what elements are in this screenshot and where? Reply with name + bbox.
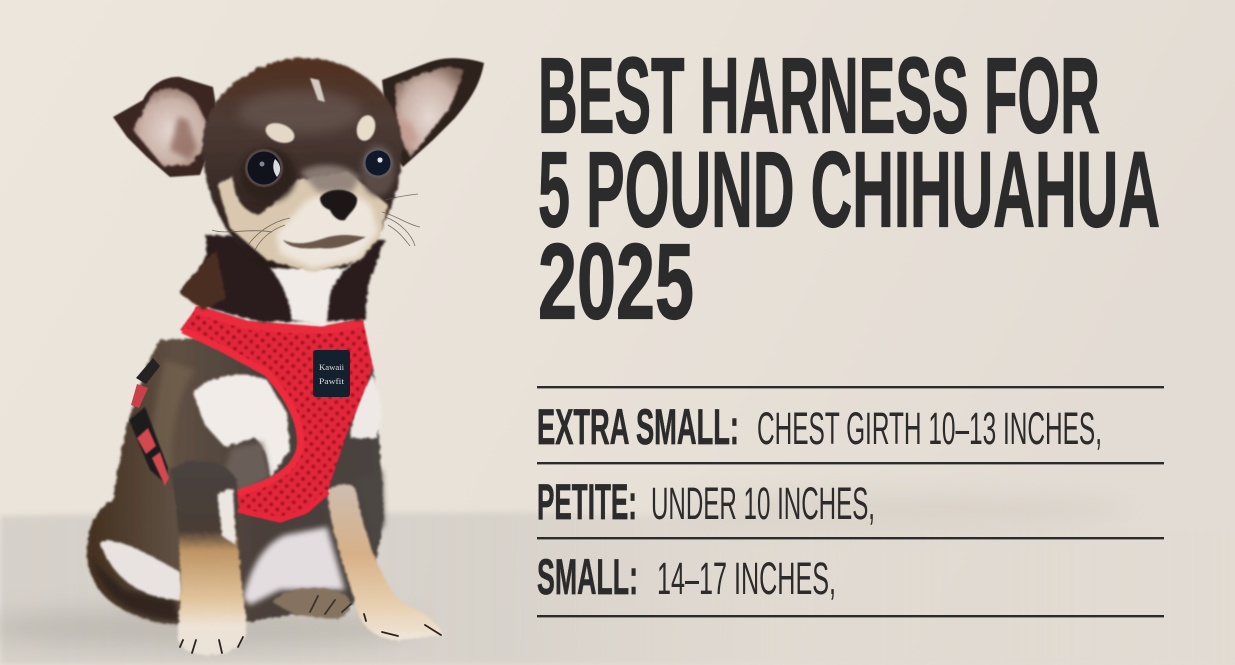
eyebrow left <box>263 119 297 147</box>
white belly <box>243 527 345 605</box>
title: 2025 <box>538 220 694 342</box>
left eye <box>245 149 283 187</box>
muzzle white <box>276 194 378 268</box>
back haunch white patch <box>100 541 182 600</box>
row: small <box>537 549 836 605</box>
floor shadow <box>0 608 420 648</box>
size list <box>537 386 1164 617</box>
lower body shadow <box>92 560 180 622</box>
left ear <box>113 77 219 177</box>
row: small: 14–17 INCHES, <box>657 553 836 604</box>
row: petite: UNDER 10 INCHES, <box>651 478 875 529</box>
right fur column <box>355 470 384 540</box>
chihuahua illustration <box>87 58 484 655</box>
harness binding <box>183 330 300 493</box>
body <box>87 335 383 624</box>
front leg left <box>170 461 247 655</box>
shoulder highlight <box>150 360 195 470</box>
harness label tag <box>313 350 350 397</box>
gray belly fur <box>225 442 270 495</box>
mouth <box>283 235 366 248</box>
neck brown tuft <box>180 250 226 310</box>
row: petite: PETITE: <box>537 474 637 530</box>
eye patches <box>240 148 296 202</box>
row: extra small: EXTRA SMALL: <box>537 399 739 455</box>
right ear <box>382 58 484 167</box>
leg white stripe <box>217 488 236 545</box>
head <box>203 58 402 268</box>
floor <box>0 512 1235 665</box>
white chest patch left <box>193 375 290 478</box>
nose <box>320 190 357 220</box>
neck <box>180 235 385 322</box>
soft shadow behind list <box>670 494 1130 526</box>
harness label tag: Kawaii <box>319 363 345 372</box>
harness <box>180 307 373 522</box>
eyebrow right <box>354 113 378 143</box>
face cream mask <box>218 172 388 272</box>
white throat <box>262 254 362 326</box>
front leg right <box>327 484 443 640</box>
row: small: SMALL: <box>537 549 638 605</box>
row: extra small <box>537 399 1102 455</box>
right eye <box>363 148 393 178</box>
back paw <box>272 588 351 619</box>
forehead sheen <box>238 90 362 134</box>
toe claws <box>180 596 441 653</box>
title <box>538 34 1160 342</box>
white chest patch right <box>350 376 381 438</box>
harness mesh panel <box>180 307 373 522</box>
back harness straps <box>129 358 169 486</box>
harness label tag: Pawfit <box>319 377 345 386</box>
row: petite <box>537 474 875 530</box>
nose bridge <box>300 165 360 192</box>
whiskers <box>212 194 420 250</box>
forehead streak <box>310 78 325 102</box>
